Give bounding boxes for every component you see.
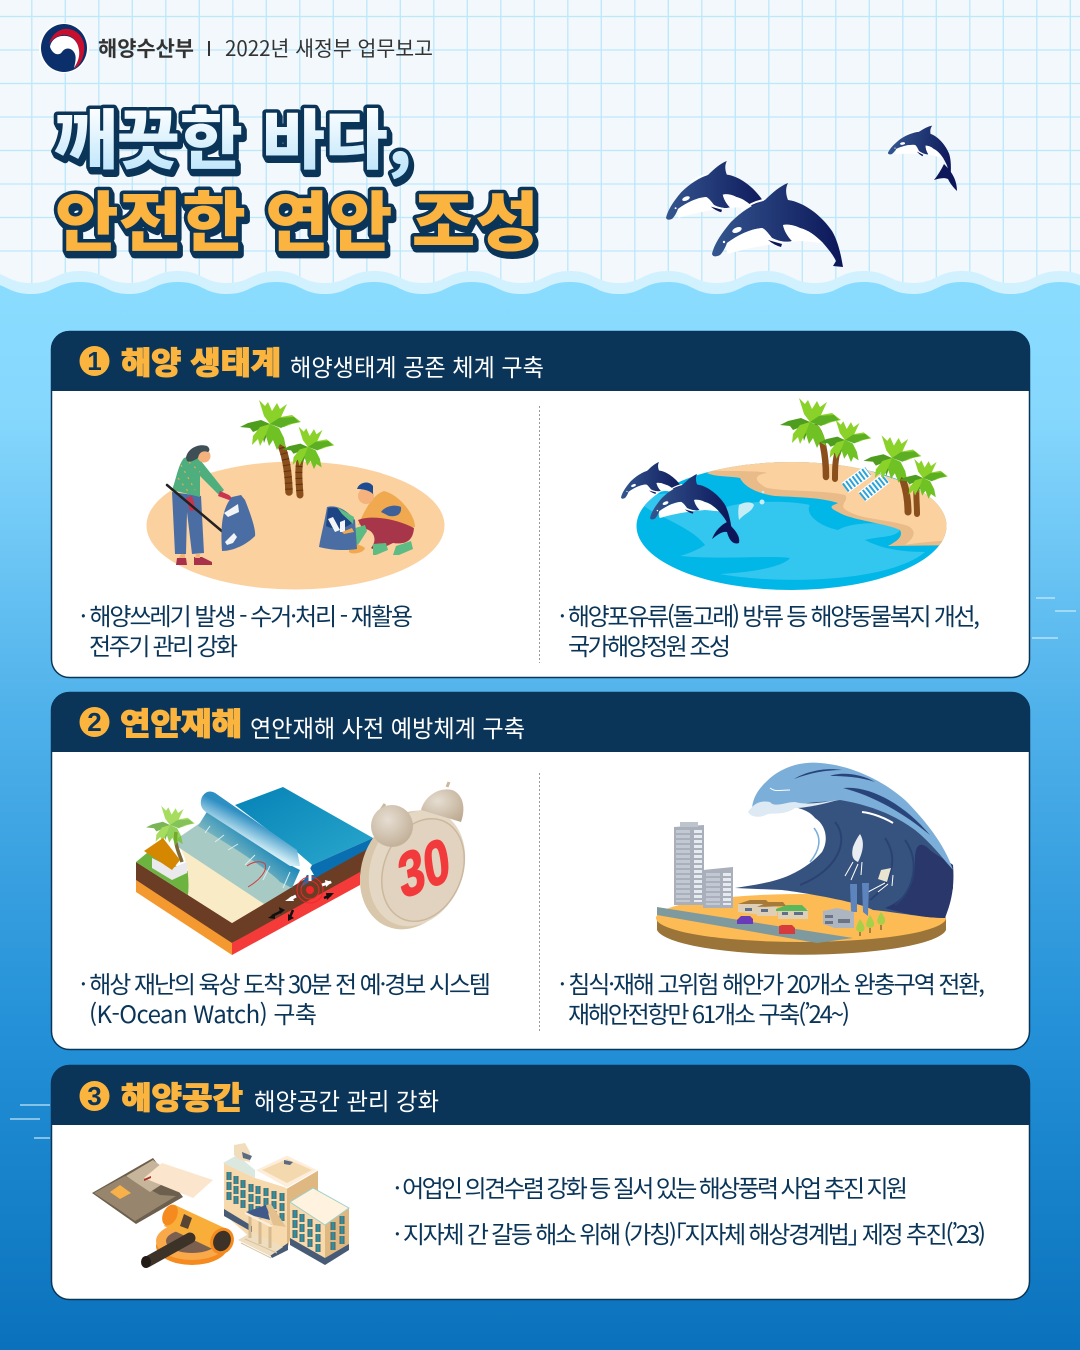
woman with litter picker: [167, 445, 236, 565]
text: marine litter management: · 해양쓰레기 발생 - 수거·처리 - 재활용: [80, 597, 413, 632]
subheading: 해양생태계 공존 체계 구축: [290, 348, 544, 383]
text: offshore wind and maritime boundary: · 어업인 의견수렴 강화 등 질서 있는 해상풍력 사업 추진 지원: [394, 1169, 908, 1204]
number badge 2: 2: [87, 707, 102, 737]
towers: [674, 822, 733, 908]
heading: marine ecosystem: 해양 생태계: [121, 338, 281, 383]
number badge 3: 3: [87, 1081, 102, 1111]
factory and trees: [823, 908, 885, 936]
heading: marine space: 해양공간: [121, 1073, 243, 1118]
deck chairs: [845, 471, 886, 497]
cottage and palm: [144, 806, 195, 880]
palms: [780, 398, 948, 514]
dolphins jumping: [621, 462, 739, 543]
number badge 3: [80, 1081, 110, 1111]
text: offshore wind and maritime boundary: [394, 1169, 986, 1250]
panel: marine spatial management: [51, 1065, 1030, 1300]
title: 안전한 연안 조성: [55, 170, 539, 264]
number badge 1: [80, 346, 110, 376]
icon: dolphins: [666, 118, 959, 267]
epicentre: [268, 868, 334, 921]
heading: coastal disaster: 연안재해: [120, 699, 242, 744]
trash bag right: [319, 506, 357, 550]
text: tsunami warning system: · 해상 재난의 육상 도착 30분 전 예·경보 시스템: [80, 965, 491, 1000]
cars: [737, 916, 795, 934]
text: erosion and safe ports: [559, 965, 985, 1030]
text: erosion and safe ports: 재해안전항만 61개소 구축(’24~): [568, 995, 850, 1030]
header logo: government taegeuk: [39, 23, 89, 73]
alarm clock: [343, 782, 482, 945]
wave: [735, 763, 953, 918]
number badge 2: [80, 707, 110, 737]
header: ministry name: 해양수산부: [98, 33, 194, 63]
title: 깨끗한 바다,: [54, 88, 412, 182]
man collecting rubbish: [348, 482, 415, 555]
number badge 1: 1: [87, 346, 102, 376]
illustration: tsunami warning block and clock: [136, 782, 482, 955]
text: marine animal welfare: [559, 597, 980, 662]
alarm clock: 30: [394, 823, 454, 912]
text: erosion and safe ports: · 침식·재해 고위험 해안가 20개소 완충구역 전환,: [559, 965, 985, 1000]
subheading: 연안재해 사전 예방체계 구축: [250, 709, 525, 744]
illustration: government building: [223, 1143, 349, 1265]
panel: marine ecosystem: [51, 331, 1030, 678]
houses: [738, 900, 808, 919]
header: report name: 2022년 새정부 업무보고: [225, 33, 433, 63]
text: tsunami warning system: [80, 965, 491, 1030]
text: marine litter management: [80, 597, 413, 662]
text: tsunami warning system: (K-Ocean Watch) 구축: [89, 995, 317, 1030]
title: [54, 88, 539, 264]
trash bag left: [221, 495, 255, 551]
illustration: big wave over coastal city: [656, 763, 953, 955]
illustration: dolphin release lagoon: [621, 398, 960, 590]
text: marine animal welfare: · 해양포유류(돌고래) 방류 등 해양동물복지 개선,: [559, 597, 980, 632]
splash: [738, 502, 754, 520]
text: marine litter management: 전주기 관리 강화: [89, 627, 238, 662]
header: separator: [208, 41, 210, 56]
text: offshore wind and maritime boundary: · 지자체 간 갈등 해소 위해 (가칭)｢지자체 해상경계법｣ 제정 추진(’23): [394, 1215, 986, 1250]
illustration: folder and gavel: [92, 1158, 236, 1268]
paper grid background: [0, 0, 1080, 320]
text: marine animal welfare: 국가해양정원 조성: [568, 627, 731, 662]
subheading: 해양공간 관리 강화: [254, 1082, 439, 1117]
panel: coastal disaster: [51, 692, 1030, 1050]
illustration: beach cleanup: [146, 400, 444, 590]
waves and sea background: [0, 271, 1080, 1350]
